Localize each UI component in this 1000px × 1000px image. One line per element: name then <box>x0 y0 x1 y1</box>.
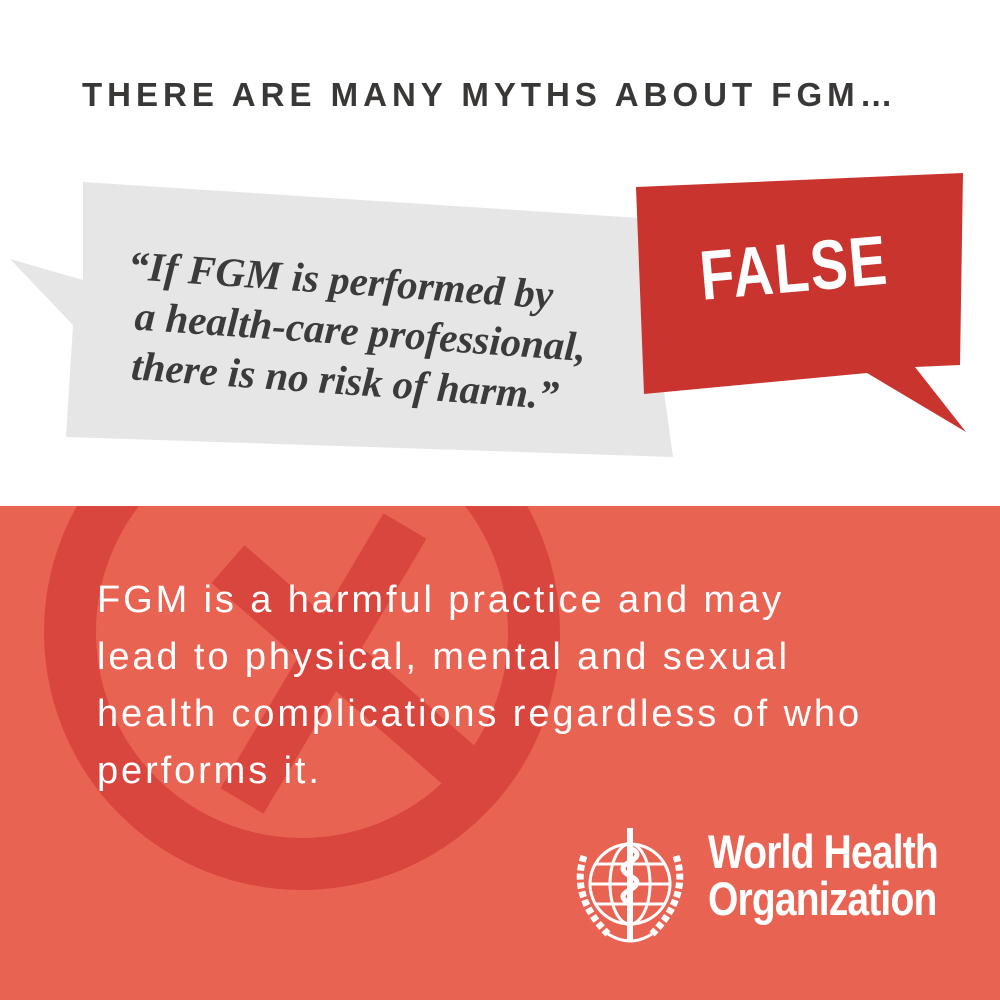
icon: WHO emblem <box>576 828 684 942</box>
fact text: performs it. <box>97 750 322 792</box>
fact text: health complications regardless of who <box>97 693 862 735</box>
myth quote text: there is no risk of harm.” <box>130 342 560 418</box>
WHO text <box>708 825 938 925</box>
icon: prohibition cross watermark <box>44 506 560 890</box>
WHO logo <box>576 825 938 942</box>
WHO text: Organization <box>708 872 936 925</box>
myth quote text <box>127 242 588 418</box>
fact text <box>97 579 862 792</box>
fact text: lead to physical, mental and sexual <box>97 636 790 678</box>
FALSE label: FALSE <box>697 221 891 315</box>
gray myth bubble <box>10 182 673 457</box>
fact text: FGM is a harmful practice and may <box>97 579 784 621</box>
myth quote text: a health-care professional, <box>133 293 588 370</box>
speech bubbles <box>10 173 966 457</box>
WHO text: World Health <box>708 825 938 878</box>
panel: fact <box>0 506 1000 1000</box>
title: THERE ARE MANY MYTHS ABOUT FGM… <box>82 76 898 113</box>
myth quote text: “If FGM is performed by <box>127 242 555 318</box>
red false bubble <box>636 173 966 432</box>
